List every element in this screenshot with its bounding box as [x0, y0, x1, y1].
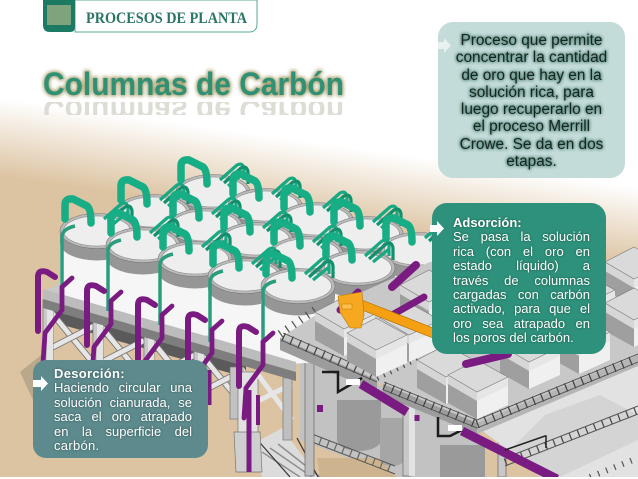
panel: adsorption: estado líquido) a [453, 258, 590, 273]
title [43, 66, 344, 129]
illustration: carbon column plant [38, 160, 638, 479]
panel: desorption: Haciendo circular una [54, 380, 192, 395]
support frame [43, 289, 296, 472]
upper deck with bins [280, 247, 638, 479]
white bottom strip [0, 477, 638, 479]
panel: desorption: solución cianurada, se [54, 395, 192, 410]
panel: process description: solución rica, para [469, 84, 594, 101]
panel: adsorption: oro sea atrapado en [453, 316, 590, 331]
title: Columnas de Carbón [43, 66, 344, 102]
panel: process description: de oro que hay en la [461, 67, 602, 84]
panel: process description: el proceso Merrill [473, 118, 590, 135]
panel: desorption: carbón. [54, 438, 99, 453]
panel: process description: concentrar la cantidad [456, 49, 607, 66]
panel: process description [438, 22, 625, 178]
panel: adsorption: través de columnas [453, 273, 590, 288]
lower structure: stairs and cylinders [253, 350, 506, 477]
panel: desorption: Desorción: [54, 366, 125, 381]
icon: arrow process description [438, 38, 451, 53]
panel: desorption: en la superficie del [54, 424, 192, 439]
thin green pipes [62, 226, 276, 352]
tanks front row [60, 199, 335, 364]
header text: PROCESOS DE PLANTA [86, 10, 247, 27]
panel: adsorption: los poros del carbón. [453, 330, 574, 345]
storage bins [315, 247, 638, 419]
panel: process description: Crowe. Se da en dos [460, 136, 603, 153]
purple pipes [38, 271, 273, 472]
panel: adsorption: Se pasa la solución [453, 229, 590, 244]
panel: adsorption: activado, para que el [453, 301, 590, 316]
tank support deck [43, 250, 400, 366]
panel: adsorption [432, 203, 606, 354]
ground shadow [20, 352, 110, 458]
panel: process description: luego recuperarlo en [461, 101, 602, 118]
panel: adsorption: cargadas con carbón [453, 287, 590, 302]
panel: desorption: saca el oro atrapado [54, 409, 192, 424]
panel: adsorption: Adsorción: [453, 215, 522, 230]
tanks back row [176, 160, 455, 328]
panel: process description: etapas. [506, 153, 557, 170]
icon: arrow desorption [33, 376, 48, 391]
icon: arrow adsorption [430, 221, 444, 236]
lower right slabs [477, 358, 638, 477]
orange hopper and conveyor [338, 292, 438, 340]
tanks middle row [116, 180, 395, 346]
header tab [43, 0, 257, 32]
panel: adsorption: rica (con el oro en [453, 244, 590, 259]
panel: process description: Proceso que permite [460, 32, 602, 49]
panel: desorption [33, 360, 208, 458]
purple feed pipes [320, 265, 557, 479]
title: Columnas de Carbón [43, 66, 344, 102]
